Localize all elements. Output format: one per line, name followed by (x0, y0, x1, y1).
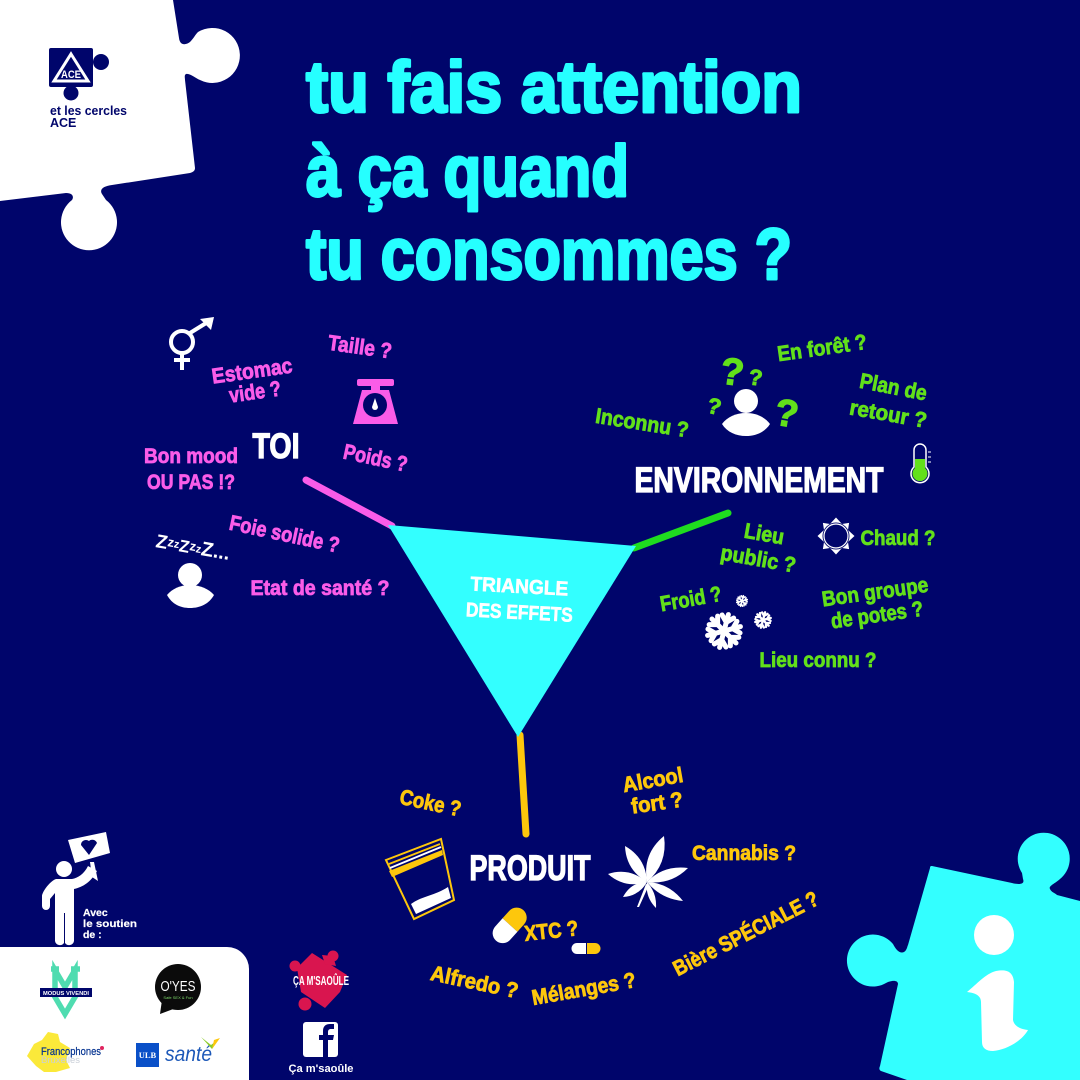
icon: sleeping person: Z... (199, 538, 232, 565)
label: taille: Taille ? (327, 331, 393, 363)
text: avec le soutien de: le soutien (83, 918, 137, 930)
label: lieu public: public ? (719, 541, 798, 578)
label: alfredo: Alfredo ? (428, 961, 520, 1003)
puzzle piece: top left with ACE logo (0, 0, 240, 250)
label: plan de retour: Plan de (858, 369, 929, 405)
title: tu fais attention (306, 48, 802, 128)
label: melanges: Mélanges ? (530, 968, 638, 1010)
label: bon mood ou pas: OU PAS !? (147, 470, 235, 494)
panel: produit (386, 763, 823, 1010)
logo: francophones bruxelles: Bruxelles (41, 1055, 81, 1065)
label: plan de retour (848, 369, 929, 433)
icon: pill large (489, 903, 531, 947)
logo: ACE puzzle: ACE (61, 69, 81, 81)
heading: produit: PRODUIT (470, 849, 590, 888)
label: en foret: En forêt ? (776, 330, 868, 366)
connector: produit (520, 735, 526, 834)
connector: toi (306, 480, 392, 526)
panel: sponsors (0, 947, 249, 1080)
icon: cannabis leaf (608, 836, 688, 908)
label: coke: Coke ? (398, 785, 463, 821)
icon: snowflakes (702, 594, 773, 652)
icon: sleeping person: z (166, 534, 176, 550)
icon arrowhead: gender symbol (200, 317, 214, 330)
label: alcool fort (621, 763, 685, 819)
label: inconnu: Inconnu ? (594, 404, 690, 442)
icon: sun (818, 518, 854, 554)
label: chaud: Chaud ? (860, 526, 936, 550)
title: tu consommes ? (306, 215, 792, 295)
icon: scale (353, 379, 398, 424)
logo: ca m'saoule puzzle: ÇA M'SAOÛLE (293, 973, 349, 988)
logo: ulb sante (136, 1037, 220, 1067)
text: avec le soutien de: Avec (83, 907, 108, 919)
logo caption: et les cercles (50, 104, 127, 118)
label: estomac vide (210, 354, 294, 408)
label: alcool fort: fort ? (630, 788, 684, 819)
label: lieu public (719, 519, 798, 578)
title: à ça quand (306, 132, 629, 212)
logo: ulb sante: santé (165, 1043, 212, 1066)
heading: environnement: ENVIRONNEMENT (634, 461, 884, 500)
icon: bag of powder (386, 839, 454, 919)
logo: ca m'saoule puzzle (290, 950, 349, 1010)
logo: francophones bruxelles (27, 1032, 104, 1072)
panel: environnement (594, 330, 936, 672)
label: bon groupe de potes: de potes ? (829, 597, 925, 633)
icon: sleeping person (154, 530, 232, 608)
logo: ACE puzzle (49, 48, 109, 100)
icon: confused person: ? (747, 364, 764, 391)
label: biere speciale: Bière SPÉCIALE ? (669, 886, 823, 981)
icon: facebook (303, 1022, 338, 1057)
text: avec le soutien de: de : (83, 929, 102, 941)
puzzle shape: white (0, 0, 240, 250)
panel: toi (144, 317, 410, 608)
label: lieu connu: Lieu connu ? (760, 648, 876, 672)
logo: modus vivendi: MODUS VIVENDI (43, 991, 89, 997)
title (306, 48, 802, 295)
label: alcool fort: Alcool (621, 763, 685, 797)
icon: pill small (572, 943, 600, 954)
logo: o'yes: O'YES (160, 978, 196, 995)
icon: sleeping person: Z (178, 536, 191, 557)
icon: sleeping person: z (173, 538, 181, 551)
logo: francophones bruxelles: Francophones (41, 1046, 101, 1058)
label: bon groupe de potes: Bon groupe (820, 573, 930, 611)
icon: confused person (705, 350, 802, 437)
icon: confused person: ? (705, 393, 724, 420)
label: plan de retour: retour ? (848, 396, 929, 433)
icon: thermometer (911, 444, 931, 483)
label: lieu public: Lieu (742, 519, 786, 549)
text: ca m'saoule: Ça m'saoûle (288, 1063, 354, 1075)
icon: sleeping person: z (195, 543, 203, 556)
label: foie solide: Foie solide ? (227, 511, 342, 558)
triangle des effets: TRIANGLE (470, 573, 569, 601)
icon: confused person: ? (718, 350, 747, 395)
label: cannabis: Cannabis ? (692, 841, 796, 865)
logo: o'yes: Safe SEX & Fun (163, 995, 193, 1000)
triangle des effets (388, 525, 636, 737)
connector: environnement (634, 513, 728, 548)
logo: o'yes (155, 964, 201, 1014)
logo: modus vivendi (40, 969, 92, 1014)
logo: ulb sante: ULB (139, 1050, 157, 1060)
sponsor panel background (0, 947, 249, 1080)
label: froid: Froid ? (658, 582, 723, 616)
puzzle piece: bottom right info (847, 833, 1080, 1080)
heading: toi: TOI (252, 427, 300, 466)
label: estomac vide: Estomac (210, 354, 294, 389)
label: estomac vide: vide ? (228, 377, 282, 408)
icon: gender symbol (171, 320, 211, 370)
label: etat de sante: Etat de santé ? (250, 576, 390, 600)
icon: sleeping person: Z (154, 531, 170, 554)
label: bon groupe de potes (820, 573, 930, 633)
icon: letter i (967, 915, 1028, 1051)
icon: confused person: ? (771, 392, 802, 437)
logo caption: ACE (50, 116, 76, 130)
triangle des effets: DES EFFETS (465, 599, 573, 627)
label: bon mood ou pas: Bon mood (144, 444, 238, 468)
label: poids: Poids ? (341, 440, 410, 477)
label: xtc: XTC ? (523, 916, 579, 946)
icon: person with heart sign (42, 832, 110, 945)
label: bon mood ou pas (144, 444, 238, 494)
icon: sleeping person: z (188, 538, 198, 554)
